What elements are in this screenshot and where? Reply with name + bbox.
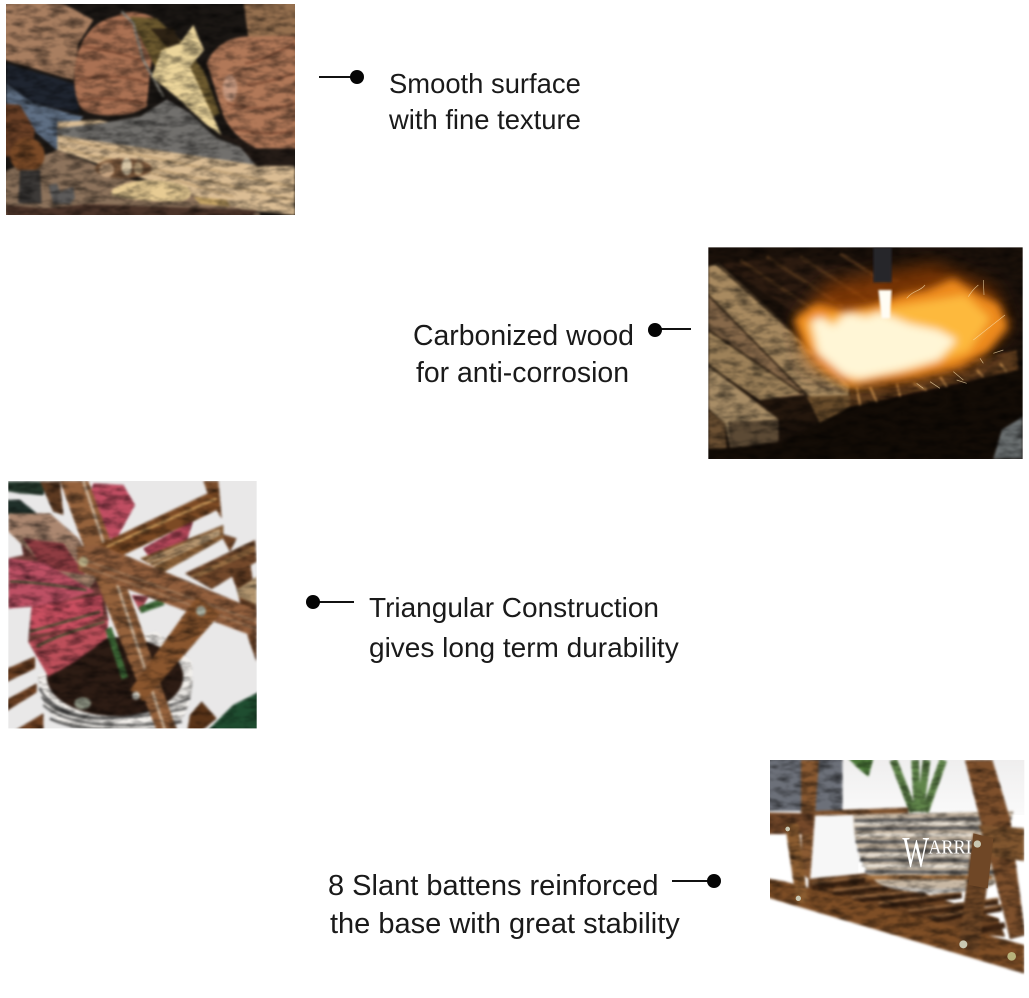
pointer dot	[707, 874, 721, 888]
photo: slanted battens on base: ARRI	[928, 836, 972, 858]
pointer line	[653, 328, 691, 330]
photo: hand planing wood	[6, 4, 295, 215]
pointer dot	[306, 595, 320, 609]
text: carbonized wood: for anti-corrosion	[416, 357, 629, 389]
text: carbonized wood	[413, 320, 634, 389]
text: slant battens	[328, 870, 680, 940]
pointer dot	[350, 70, 364, 84]
text: smooth surface: Smooth surface	[389, 68, 581, 99]
pointer line	[313, 601, 354, 603]
pointer dot	[648, 323, 662, 337]
pointer line	[672, 880, 710, 882]
text: slant battens: 8 Slant battens reinforced	[328, 870, 658, 902]
photo: triangular construction with plant	[8, 481, 257, 728]
text: carbonized wood: Carbonized wood	[413, 320, 634, 352]
text: triangular construction: Triangular Construction	[369, 592, 659, 623]
photo: torch carbonizing wood	[708, 247, 1023, 459]
text: smooth surface: with fine texture	[389, 104, 581, 135]
callout: slant battens	[328, 870, 721, 940]
pointer line	[319, 76, 355, 78]
callout: triangular construction	[306, 592, 679, 663]
text: slant battens: the base with great stability	[330, 908, 680, 940]
callout: carbonized wood	[413, 320, 691, 389]
photo: slanted battens on base: W	[902, 829, 929, 877]
callout: smooth surface	[319, 68, 581, 135]
photo: slanted battens on base	[770, 760, 1024, 975]
text: triangular construction: gives long term durability	[369, 632, 679, 663]
text: smooth surface	[389, 68, 581, 135]
text: triangular construction	[369, 592, 679, 663]
